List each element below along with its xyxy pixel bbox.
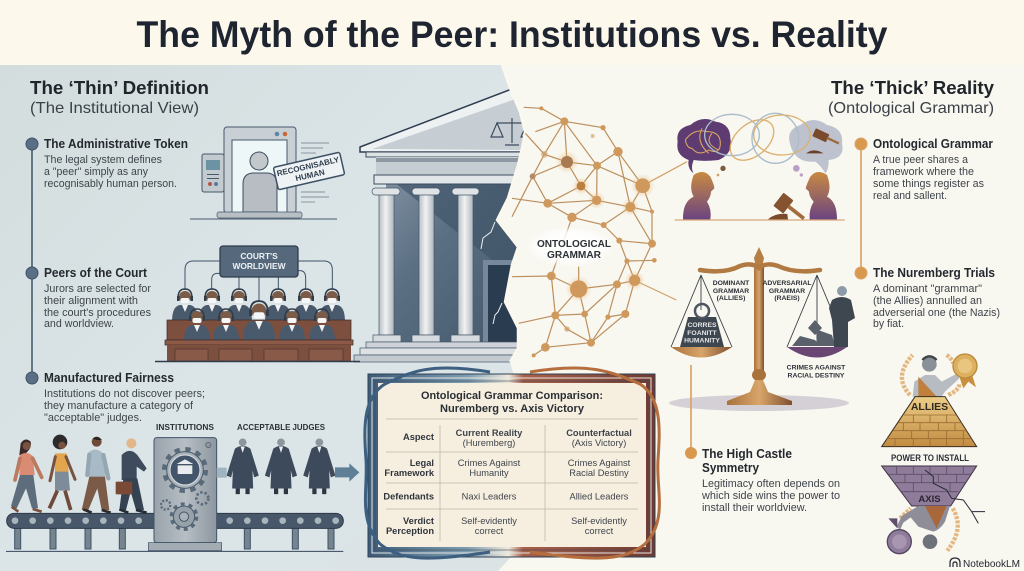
table rows: Self-evidently [461,516,517,526]
text block: ontological grammar: some things register as [873,178,984,190]
illustration: conveyor machine [6,435,359,551]
text block: administrative token: The Administrative Token [44,137,188,151]
text block: manufactured fairness: they manufacture a category of [44,400,193,412]
heading: thin definition: The ‘Thin’ Definition [30,77,209,98]
scale labels: ADVERSARIAL [762,280,812,287]
text block: manufactured fairness: Manufactured Fairness [44,371,174,385]
text block: administrative token [44,137,188,190]
interlocking rings [705,112,810,168]
table rows [383,428,632,536]
court's worldview sign [220,246,298,277]
text block: ontological grammar: Ontological Grammar [873,137,993,151]
text block: manufactured fairness: Institutions do not discover peers; [44,388,205,400]
table rows: (Huremberg) [463,438,515,448]
text block: administrative token: a "peer" simply as any [44,166,149,178]
scale labels: GRAMMAR [713,288,749,295]
table title [421,390,603,415]
right silhouette [806,172,837,219]
text block: administrative token: recognisably human person. [44,178,177,190]
illustration: jury and worldview [155,246,360,362]
court's worldview sign: COURT'S [240,251,278,261]
text block: manufactured fairness: "acceptable" judges. [44,412,142,424]
label: acceptable judges: ACCEPTABLE JUDGES [237,422,325,432]
icon: identity scanner: RECOGNISABLY [276,155,341,178]
network label [537,239,611,261]
scale labels [713,280,846,380]
robed judges [227,438,335,494]
table rows: Racial Destiny [569,468,629,478]
people entering [11,435,147,513]
illustration: power pyramid [882,354,985,554]
text block: peers of the court: the court's procedures [44,307,151,319]
axis statue and seal [887,506,958,554]
illustration: two minds sharing a grammar [675,112,845,225]
heading: thick reality [828,77,995,117]
arrow [335,463,359,482]
illustration: ontological grammar network [512,106,687,357]
nazi figure on pan [829,286,855,347]
text block: high castle symmetry: Symmetry [702,461,759,475]
text block: peers of the court [44,266,151,330]
scale labels: RACIAL DESTINY [788,372,845,380]
table rows: Current Reality [456,428,523,438]
heading: thin definition [30,77,209,117]
table rows: Allied Leaders [570,492,629,502]
table title: Ontological Grammar Comparison: [421,390,603,402]
text block: ontological grammar: real and sallent. [873,190,947,202]
heading: thin definition: (The Institutional View) [30,100,199,117]
header band [0,0,1024,65]
text block: nuremberg trials: by fiat. [873,318,904,330]
torn paper edge [497,65,525,362]
allies pyramid [882,397,977,447]
conveyor belt [6,513,343,551]
panel: comparison table [365,368,659,558]
power to install label: POWER TO INSTALL [891,452,969,463]
network label: GRAMMAR [547,250,602,261]
logo: NotebookLM: NotebookLM [963,559,1020,570]
text block: peers of the court: Jurors are selected for [44,283,151,295]
text block: ontological grammar: framework where the [873,166,974,178]
text block: peers of the court: and worldview. [44,318,114,330]
table rows: Crimes Against [458,458,521,468]
illustration: balance scale: CORRES [687,322,717,329]
allied statue and medal [902,354,977,397]
table rows: Aspect [403,432,434,442]
text block: high castle symmetry: Legitimacy often depends on [702,478,840,490]
text block: administrative token: The legal system defines [44,154,162,166]
text block: nuremberg trials: (the Allies) annulled an [873,295,982,307]
table rows: Perception [386,526,434,536]
icon: courthouse [354,82,536,362]
text block: nuremberg trials: The Nuremberg Trials [873,266,995,280]
table rows: correct [585,526,614,536]
text block: high castle symmetry: install their worldview. [702,502,807,514]
table rows: Humanity [469,468,509,478]
label: institutions: INSTITUTIONS [156,422,214,432]
heading: thick reality: (Ontological Grammar) [828,100,994,117]
text block: peers of the court: their alignment with [44,295,138,307]
axis inverted pyramid [882,466,985,523]
illustration: balance scale [669,247,855,411]
table title: Nuremberg vs. Axis Victory [440,403,585,415]
text block: high castle symmetry [685,365,840,514]
icon: identity scanner: HUMAN [294,168,326,183]
table rows: correct [475,526,504,536]
text block: nuremberg trials: A dominant "grammar" [873,283,982,295]
text block: peers of the court: Peers of the Court [44,266,148,280]
table rows: Defendants [383,492,434,502]
table rows: Legal [410,458,434,468]
scale labels: (ALLIES) [717,295,745,302]
right thought cloud with gavel [789,120,843,177]
illustration: balance scale: FOANITT [687,330,718,337]
table rows: Counterfactual [566,428,632,438]
text block: high castle symmetry: The High Castle [702,447,792,461]
text block: ontological grammar [873,137,993,202]
text block: nuremberg trials: adverserial one (the Nazis) [873,307,1000,319]
heading: thick reality: The ‘Thick’ Reality [831,77,995,98]
icon: identity scanner [190,127,345,219]
panel: thin definition background [0,65,530,571]
table rows: Verdict [403,516,434,526]
text block: high castle symmetry: which side wins the power to [701,490,840,502]
court's worldview sign: WORLDVIEW [232,261,286,271]
table rows: Framework [384,468,435,478]
illustration: balance scale: HUMANITY [684,338,720,344]
network label: ONTOLOGICAL [537,239,611,250]
axis label: AXIS [918,494,941,505]
scale labels: CRIMES AGAINST [787,364,846,372]
scale labels: GRAMMAR [769,288,805,295]
table rows: Crimes Against [568,458,631,468]
title: The Myth of the Peer: Institutions vs. Reality [136,14,888,55]
text block: ontological grammar: A true peer shares a [873,154,968,166]
gavel on ground [675,193,845,225]
timeline: left [26,138,38,384]
table rows: Naxi Leaders [462,492,517,502]
table rows: (Axis Victory) [572,438,626,448]
scale labels: DOMINANT [713,280,750,287]
scale labels: (RAEIS) [774,295,800,302]
table rows: Self-evidently [571,516,627,526]
processing machine [148,438,222,551]
text block: manufactured fairness [44,371,205,424]
timeline: right [855,138,867,279]
left thought cloud with brain [677,119,731,176]
text block: nuremberg trials [873,266,1000,330]
allies label: ALLIES [911,401,948,413]
left silhouette [683,172,714,219]
